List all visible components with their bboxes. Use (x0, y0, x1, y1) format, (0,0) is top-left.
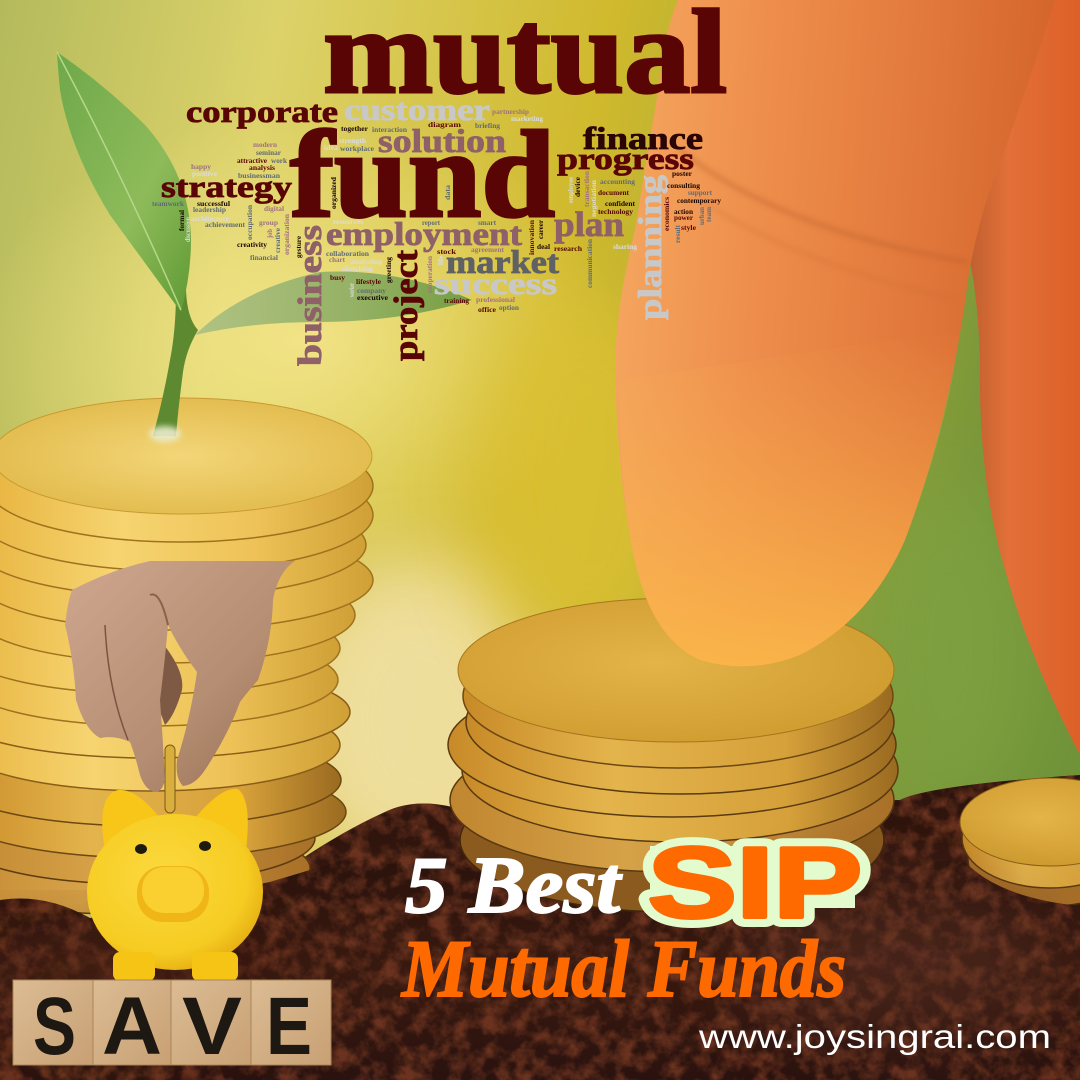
eyes (135, 844, 147, 854)
small vertical words: employee (566, 176, 575, 203)
ears (102, 790, 160, 845)
small horizontal words: training (444, 296, 469, 305)
small horizontal words: poster (672, 169, 693, 178)
soil foreground (0, 850, 1080, 1080)
SAVE wooden blocks: A (102, 981, 162, 1072)
small horizontal words: lifestyle (356, 277, 382, 286)
snout (137, 866, 209, 922)
word: corporate: corporate (186, 94, 338, 129)
small vertical words: job (265, 229, 274, 239)
small horizontal words: consulting (667, 181, 700, 190)
small vertical words: communication (585, 238, 594, 288)
small horizontal words: sharing (613, 242, 637, 251)
small horizontal words: diagram (428, 120, 462, 129)
title: 5 Best: 5 Best (405, 842, 623, 930)
small horizontal words: attractive (237, 156, 268, 165)
SAVE wooden blocks (13, 980, 331, 1072)
small horizontal words: executive (357, 293, 389, 302)
small vertical words: result (673, 225, 682, 243)
small horizontal words: sketching (342, 264, 373, 273)
small vertical words: transaction (582, 170, 591, 207)
coin held by fingers (165, 745, 175, 813)
small horizontal words: teamwork (152, 199, 185, 208)
small horizontal words: partnership (492, 107, 529, 116)
small vertical words: cooperation (425, 255, 434, 293)
small horizontal words: resources (333, 217, 363, 226)
word: employment: employment (326, 217, 522, 253)
hand dropping a coin (65, 561, 295, 813)
small horizontal words: marketing (511, 114, 543, 123)
small vertical words: organization (282, 213, 291, 255)
centre coin stack (448, 598, 898, 912)
small horizontal words: document (598, 188, 629, 197)
small horizontal words: option (499, 303, 520, 312)
title: Mutual Funds: Mutual Funds (400, 923, 846, 1014)
small horizontal words: achievement (205, 220, 245, 229)
small vertical words: organized (329, 176, 338, 209)
small horizontal words: confident (605, 199, 636, 208)
small horizontal words: technology (598, 207, 633, 216)
small horizontal words: busy (330, 273, 345, 282)
word: success: success (434, 266, 557, 301)
small horizontal words: smart (478, 218, 496, 227)
small horizontal words (152, 107, 721, 314)
word: plan: plan (554, 205, 624, 244)
small vertical words: data (443, 185, 452, 200)
word: business: business (292, 225, 329, 366)
small horizontal words: research (554, 244, 583, 253)
small horizontal words: collaboration (326, 249, 370, 258)
small vertical words: team (704, 206, 713, 222)
small horizontal words: happy (191, 162, 211, 171)
SAVE wooden blocks: V (182, 981, 242, 1072)
middle finger behind, in shadow (152, 640, 182, 725)
small horizontal words: work (271, 156, 288, 165)
large leaf (57, 52, 191, 312)
small vertical words: gesture (294, 235, 303, 258)
small horizontal words: professional (476, 295, 515, 304)
small horizontal words: analysis (249, 163, 275, 172)
small horizontal words: financial (250, 253, 278, 262)
small vertical words: economics (662, 197, 671, 231)
small vertical words: occupation (245, 204, 254, 240)
small horizontal words: successful (197, 199, 230, 208)
small horizontal words: company (357, 286, 386, 295)
small horizontal words: architecture (191, 214, 230, 223)
word: solution: solution (378, 124, 506, 160)
small horizontal words: action (674, 207, 694, 216)
small horizontal words: analyzing (350, 257, 382, 266)
small vertical words: discussion (183, 216, 192, 242)
small vertical words: formal (177, 210, 186, 231)
word: planning: planning (633, 174, 669, 320)
word: strategy: strategy (161, 169, 293, 204)
small horizontal words: chart (329, 255, 345, 264)
small horizontal words: stock (437, 247, 457, 256)
soil behind the coins (305, 775, 1080, 912)
small horizontal words: creativity (237, 240, 267, 249)
small horizontal words: office (478, 305, 497, 314)
small horizontal words: deal (537, 242, 550, 251)
SAVE wooden blocks: E (266, 981, 312, 1072)
title: SIP badge: SIP (648, 827, 862, 939)
word: finance: finance (583, 120, 703, 156)
small horizontal words: accounting (600, 177, 635, 186)
small horizontal words: together (341, 124, 369, 133)
stem (153, 290, 198, 436)
small horizontal words: idea (324, 143, 338, 152)
word: project: project (388, 249, 425, 361)
palm, index finger and outer fingers (65, 561, 295, 792)
centre top coin face (458, 598, 894, 742)
small vertical words: worker (347, 283, 356, 297)
small horizontal words: group (259, 218, 278, 227)
small vertical words: urban (697, 206, 706, 225)
main finger (615, 0, 1055, 666)
small horizontal words: modern (253, 140, 278, 149)
small horizontal words: contemporary (677, 196, 721, 205)
plant: stem and leaves (57, 52, 472, 442)
word: customer: customer (344, 92, 490, 127)
word: fund: fund (290, 106, 555, 243)
small vertical words: innovation (527, 219, 536, 255)
small horizontal words: briefing (475, 121, 500, 130)
SAVE wooden blocks: S (33, 981, 76, 1072)
website url: www.joysingrai.com (698, 1018, 1051, 1055)
left coin stack (0, 398, 373, 914)
small vertical words: career (536, 219, 545, 239)
small horizontal words: businessman (238, 171, 281, 180)
right coin stack (960, 778, 1080, 906)
word: progress: progress (557, 141, 694, 176)
small vertical words (177, 170, 713, 297)
word: market: market (446, 245, 559, 281)
small horizontal words: positive (192, 169, 218, 178)
piggy bank (87, 789, 263, 981)
body (87, 814, 263, 970)
small vertical words: greeting (384, 257, 393, 283)
title: SIP badge: SIP (648, 827, 862, 939)
small horizontal words: report (422, 218, 440, 227)
feet (113, 952, 155, 981)
small horizontal words: workplace (340, 144, 375, 153)
small vertical words: device (573, 176, 582, 197)
second finger (970, 0, 1080, 755)
top coin face (0, 398, 372, 514)
small horizontal words: digital (264, 204, 284, 213)
side leaf (195, 272, 472, 335)
small horizontal words: strength (339, 136, 367, 145)
small vertical words: life (436, 255, 445, 265)
small vertical words: negotiation (589, 179, 598, 217)
hand fingers pressing the coin stack (615, 0, 1080, 755)
small horizontal words: seminar (256, 148, 282, 157)
small horizontal words: support (688, 188, 712, 197)
word cloud (152, 0, 727, 366)
small horizontal words: style (681, 223, 697, 232)
small horizontal words: power (674, 213, 694, 222)
small horizontal words: interaction (372, 125, 408, 134)
small vertical words: creative (273, 227, 282, 253)
small horizontal words: agreement (471, 245, 504, 254)
small horizontal words: leadership (193, 205, 226, 214)
